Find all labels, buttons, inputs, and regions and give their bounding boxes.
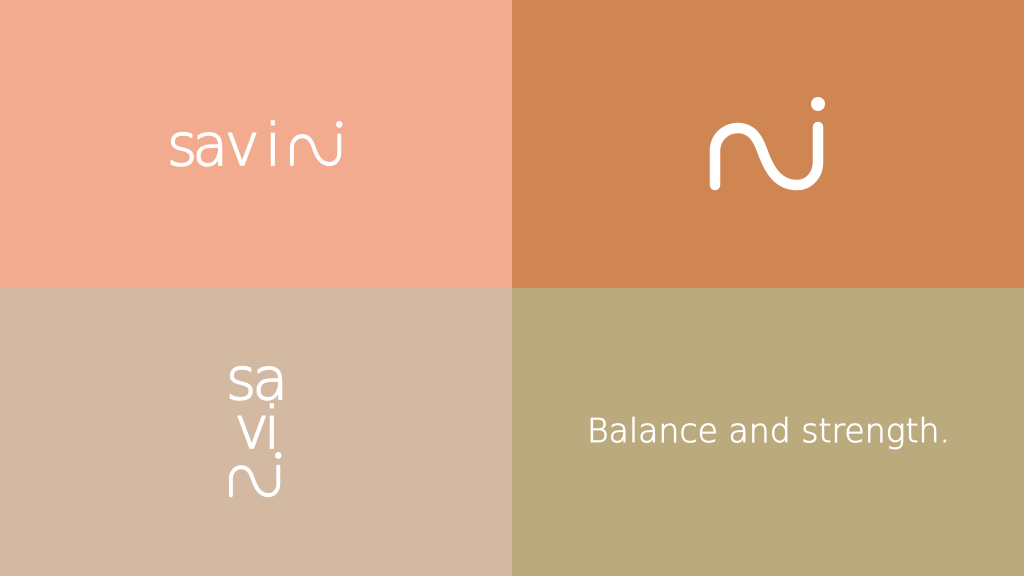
icon: ni mark small xyxy=(292,121,342,164)
horizontal logo xyxy=(167,111,342,179)
icon: ni mark large xyxy=(715,97,825,185)
wordmark line: sa: sa xyxy=(226,345,288,413)
panel: beige background xyxy=(0,288,512,576)
panel: olive background xyxy=(512,288,1024,576)
wordmark letters: savi xyxy=(167,111,281,179)
icon: ni mark stacked xyxy=(231,452,282,495)
panel: peach background xyxy=(0,0,512,288)
panel: terracotta background xyxy=(512,0,1024,288)
stacked logo xyxy=(226,345,288,495)
wordmark line: vi: vi xyxy=(234,394,280,462)
tagline: Balance and strength. xyxy=(587,411,950,450)
